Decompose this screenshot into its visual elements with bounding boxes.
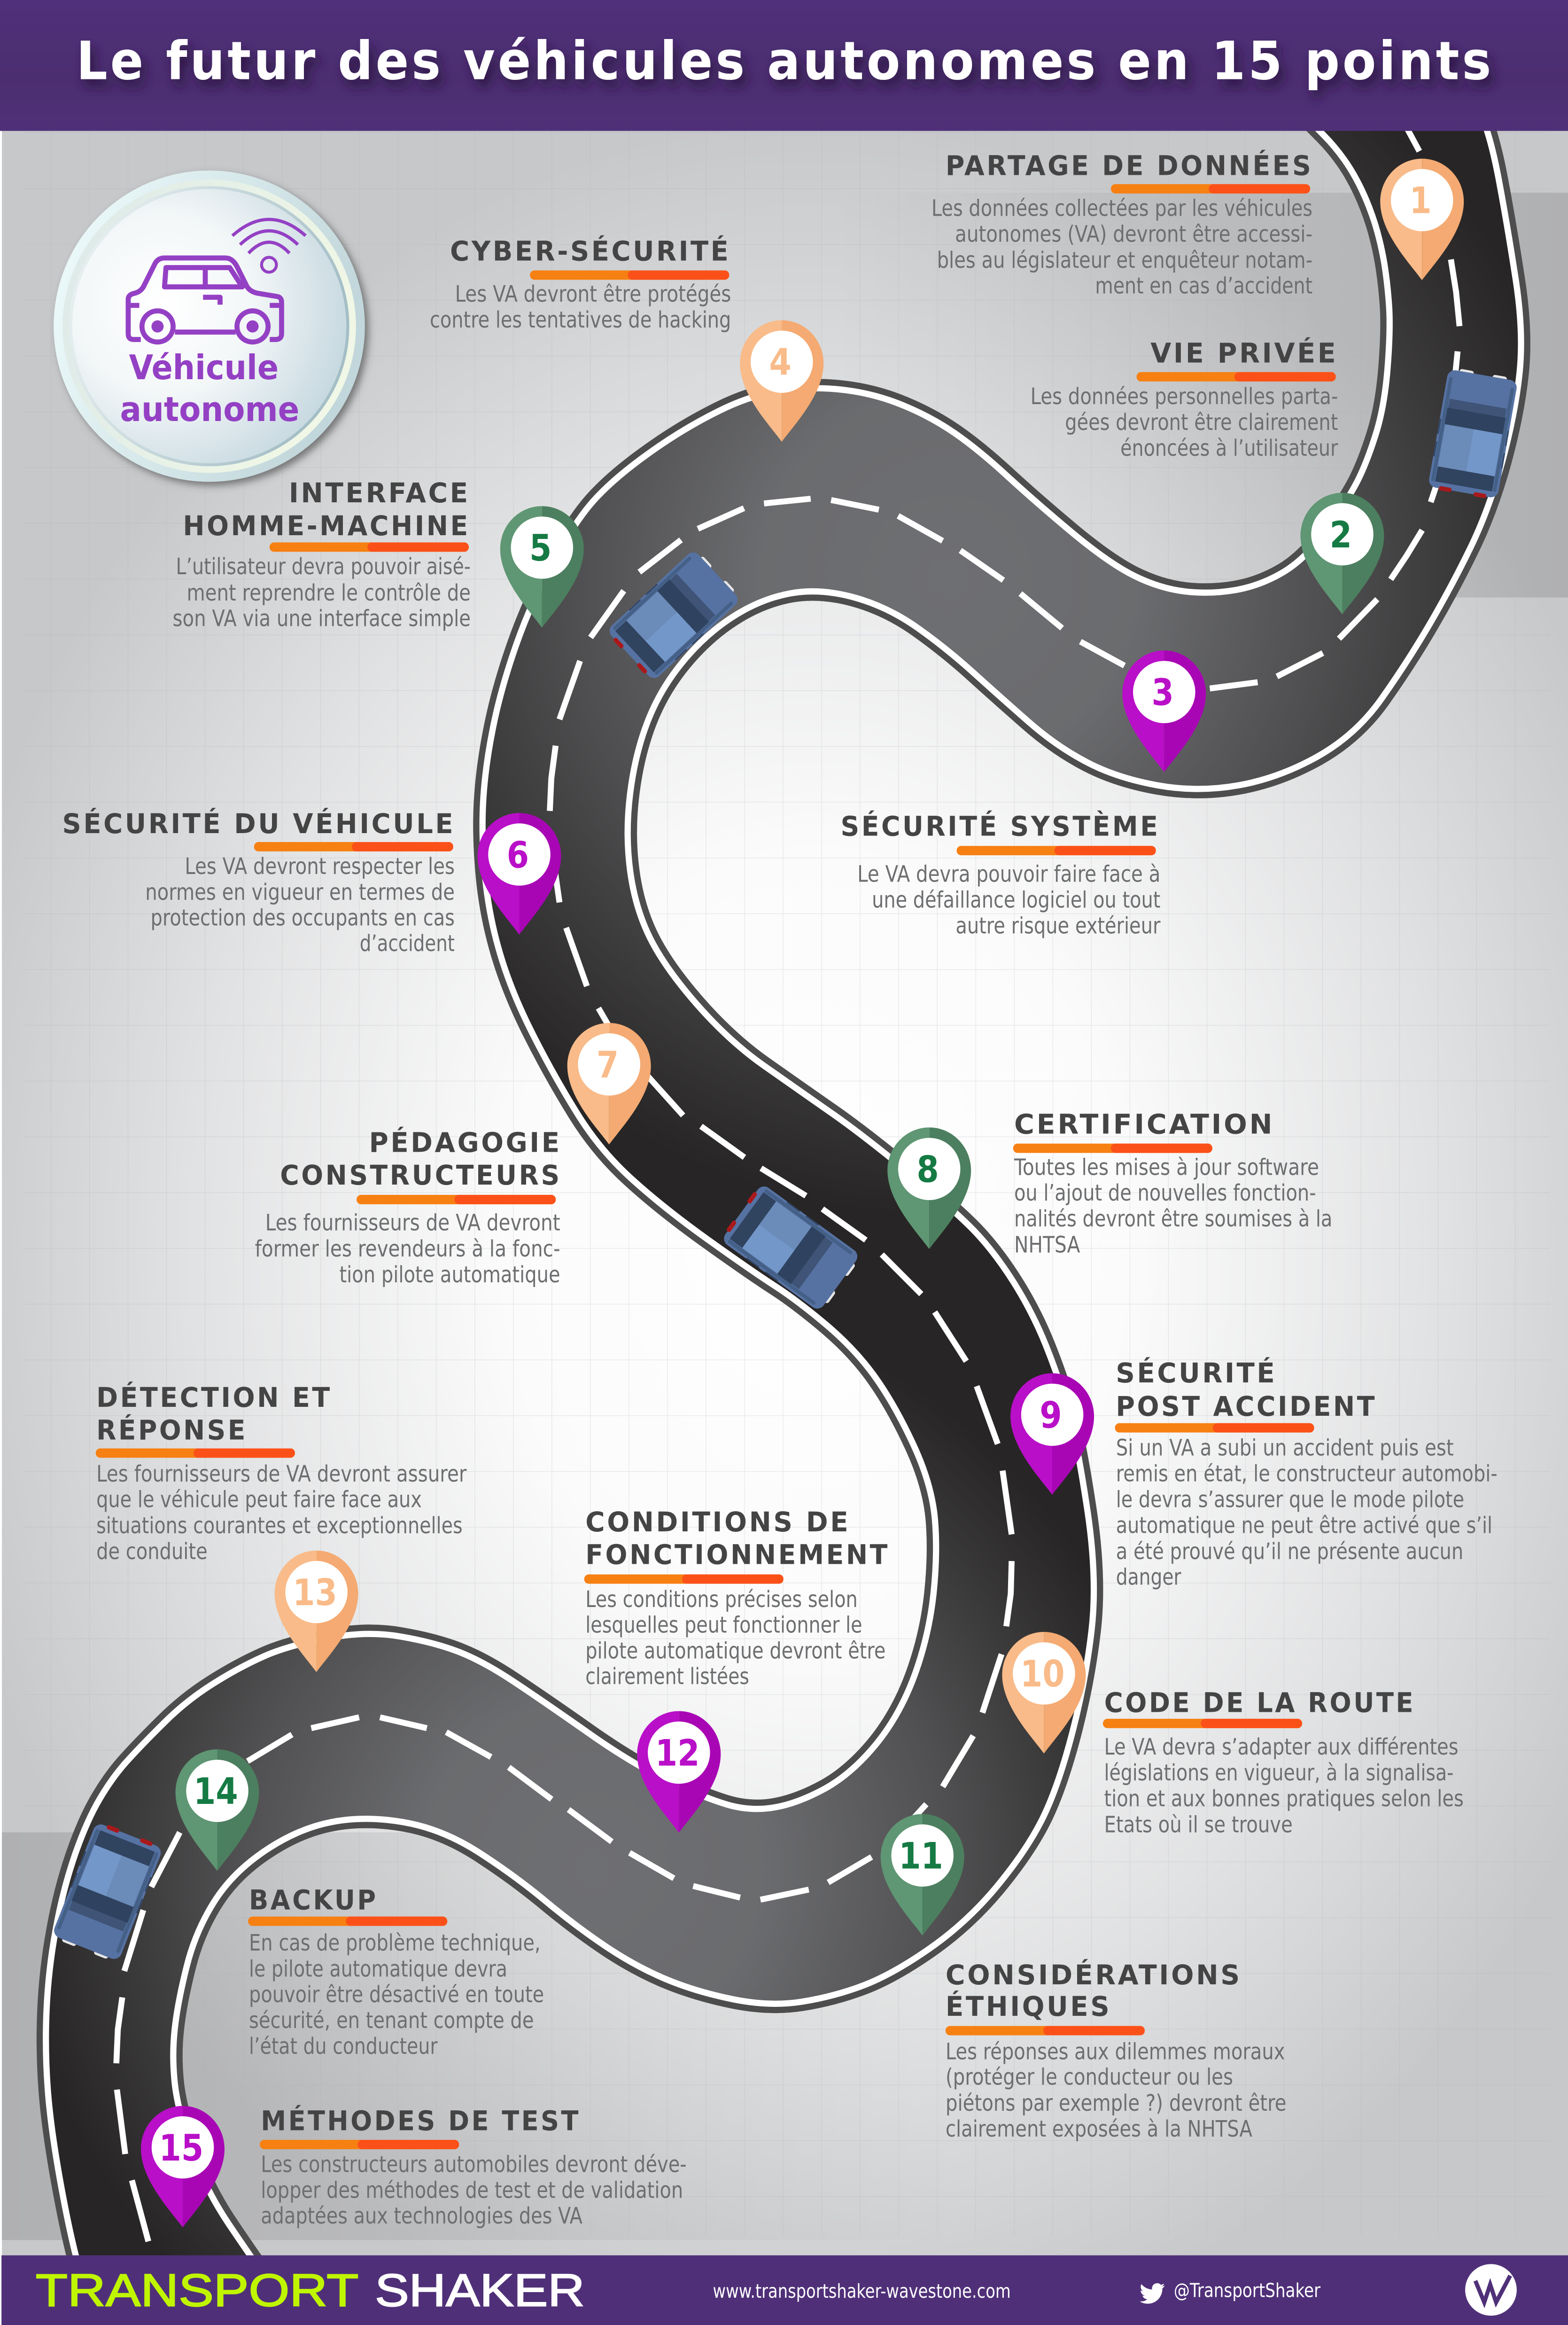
point 8: certification: NHTSA (1014, 1232, 1080, 1258)
point 13: détection et réponse: Les fournisseurs de VA devront assurer (96, 1461, 467, 1487)
wavestone logo (1465, 2264, 1517, 2316)
header band (0, 0, 1568, 131)
pin 13: 13 (293, 1572, 337, 1614)
point 4: cyber-sécurité (430, 235, 731, 333)
point 7: pédagogie constructeurs: Les fournisseurs de VA devront (265, 1210, 560, 1236)
point 3: sécurité système: Le VA devra pouvoir faire face à (857, 861, 1160, 888)
point 1: partage de données: bles au législateur et enquêteur notam- (937, 247, 1312, 273)
point 11: considérations éthiques: piétons par exemple ?) devront être (946, 2090, 1287, 2116)
point 12: conditions de fonctionnement: FONCTIONNEMENT (585, 1539, 890, 1571)
pin 12: 12 (655, 1732, 699, 1775)
pin 15 (141, 2106, 225, 2227)
pin 4 (740, 320, 823, 442)
point 5: interface homme-machine: L’utilisateur devra pouvoir aisé- (176, 554, 471, 580)
point 13: détection et réponse: RÉPONSE (96, 1414, 248, 1446)
point 10: code de la route: législations en vigueur, à la signalisa- (1104, 1760, 1453, 1786)
point 15: méthodes de test (260, 2105, 687, 2229)
point 1: partage de données: PARTAGE DE DONNÉES (946, 149, 1313, 181)
pin 12 (637, 1711, 721, 1833)
icon: connected car (128, 219, 306, 342)
point 9: sécurité post accident: POST ACCIDENT (1116, 1390, 1377, 1422)
point 8: certification: Toutes les mises à jour software (1014, 1154, 1319, 1180)
point 2: vie privée: gées devront être clairement (1065, 409, 1338, 436)
pin 14: 14 (194, 1771, 238, 1813)
point 12: conditions de fonctionnement: Les conditions précises selon (585, 1586, 858, 1613)
pin 9: 9 (1040, 1395, 1062, 1437)
pin 11 (881, 1814, 964, 1935)
point 6: sécurité du véhicule (62, 808, 455, 957)
point 14: backup: En cas de problème technique, (249, 1930, 541, 1956)
point 14: backup: sécurité, en tenant compte de (249, 2007, 534, 2034)
point 12: conditions de fonctionnement (584, 1506, 890, 1690)
point 10: code de la route: Etats où il se trouve (1104, 1811, 1293, 1838)
badge: véhicule autonome: autonome (120, 390, 299, 429)
website url: www.transportshaker-wavestone.com (713, 2280, 1011, 2302)
badge: véhicule autonome (54, 171, 365, 482)
point 7: pédagogie constructeurs: tion pilote automatique (339, 1262, 560, 1288)
point 1: partage de données: ment en cas d’accident (1095, 273, 1312, 299)
point 8: certification: nalités devront être soumises à la (1014, 1206, 1332, 1232)
pin 1: 1 (1409, 180, 1432, 222)
pin 3: 3 (1151, 672, 1174, 714)
twitter handle: @TransportShaker (1174, 2279, 1320, 2302)
point 1: partage de données: autonomes (VA) devront être accessi- (955, 221, 1312, 248)
point 9: sécurité post accident: a été prouvé qu’il ne présente aucun (1116, 1538, 1463, 1565)
point 10: code de la route: tion et aux bonnes pratiques selon les (1104, 1786, 1464, 1812)
point 8: certification: ou l’ajout de nouvelles fonction- (1014, 1180, 1316, 1206)
point 6: sécurité du véhicule: SÉCURITÉ DU VÉHICULE (62, 808, 455, 840)
point 12: conditions de fonctionnement: CONDITIONS DE (585, 1506, 850, 1538)
car 2 (605, 548, 742, 682)
point 4: cyber-sécurité: CYBER-SÉCURITÉ (450, 235, 730, 267)
pin 11: 11 (899, 1835, 943, 1878)
point 2: vie privée: énoncées à l’utilisateur (1120, 435, 1338, 461)
point 13: détection et réponse: de conduite (96, 1538, 208, 1565)
pin 2: 2 (1330, 514, 1352, 556)
pin 4: 4 (769, 342, 792, 384)
point 6: sécurité du véhicule: d’accident (360, 930, 455, 957)
point 11: considérations éthiques: clairement exposées à la NHTSA (946, 2116, 1252, 2142)
point 6: sécurité du véhicule: Les VA devront respecter les (185, 853, 455, 880)
pin 8 (887, 1127, 971, 1249)
point 11: considérations éthiques: CONSIDÉRATIONS (946, 1959, 1242, 1991)
pin 6 (478, 813, 561, 935)
pin 9 (1010, 1373, 1094, 1495)
badge label: Véhicule (129, 348, 279, 388)
pin 7: 7 (597, 1044, 619, 1086)
point 2: vie privée: Les données personnelles parta- (1031, 383, 1338, 410)
footer logo: SHAKER (375, 2264, 585, 2316)
car 4 (51, 1820, 164, 1964)
car 1 (1428, 367, 1518, 500)
footer logo (36, 2264, 585, 2316)
point 14: backup: pouvoir être désactivé en toute (249, 1982, 544, 2008)
point 15: méthodes de test: Les constructeurs automobiles devront déve- (261, 2152, 687, 2178)
point 7: pédagogie constructeurs: CONSTRUCTEURS (280, 1159, 562, 1191)
point 15: méthodes de test: lopper des méthodes de test et de validation (261, 2177, 683, 2203)
point 5: interface homme-machine: ment reprendre le contrôle de (187, 580, 471, 606)
point 13: détection et réponse: situations courantes et exceptionnelles (96, 1513, 463, 1539)
pin 5 (500, 506, 584, 628)
point 8: certification: CERTIFICATION (1014, 1108, 1274, 1140)
point 9: sécurité post accident: automatique ne peut être activé que s’il (1116, 1513, 1492, 1539)
point 14: backup: l’état du conducteur (249, 2033, 438, 2060)
footer logo: TRANSPORT (36, 2264, 359, 2316)
title: Le futur des véhicules autonomes en 15 points (76, 31, 1494, 92)
pin 15: 15 (159, 2127, 203, 2169)
point 9: sécurité post accident: Si un VA a subi un accident puis est (1116, 1435, 1454, 1461)
point 11: considérations éthiques: Les réponses aux dilemmes moraux (946, 2038, 1285, 2065)
point 5: interface homme-machine: INTERFACE (289, 477, 470, 509)
point 3: sécurité système: une défaillance logiciel ou tout (872, 887, 1160, 913)
point 14: backup: BACKUP (249, 1884, 378, 1916)
point 12: conditions de fonctionnement: lesquelles peut fonctionner le (585, 1612, 862, 1638)
pin 10 (1002, 1632, 1086, 1754)
point 11: considérations éthiques: (protéger le conducteur ou les (946, 2064, 1233, 2091)
point 7: pédagogie constructeurs: former les revendeurs à la fonc- (255, 1236, 560, 1262)
point 5: interface homme-machine (173, 477, 471, 632)
point 14: backup (248, 1884, 544, 2060)
point 5: interface homme-machine: son VA via une interface simple (173, 606, 471, 632)
point 10: code de la route: Le VA devra s’adapter aux différentes (1104, 1734, 1459, 1760)
point 15: méthodes de test: MÉTHODES DE TEST (261, 2105, 581, 2137)
point 3: sécurité système: SÉCURITÉ SYSTÈME (841, 810, 1160, 842)
point 13: détection et réponse: DÉTECTION ET (96, 1381, 332, 1413)
point 9: sécurité post accident (1115, 1357, 1498, 1591)
pin 7 (567, 1023, 651, 1145)
pin 3 (1122, 650, 1206, 772)
point 6: sécurité du véhicule: protection des occupants en cas (151, 905, 455, 931)
pin 14 (176, 1749, 259, 1871)
point 1: partage de données (931, 149, 1313, 299)
point 13: détection et réponse (96, 1381, 467, 1565)
pin 2 (1301, 493, 1384, 614)
pin 10: 10 (1020, 1653, 1065, 1695)
footer band (1, 2255, 1568, 2325)
icon: twitter bird (1140, 2283, 1165, 2304)
point 12: conditions de fonctionnement: pilote automatique devront être (585, 1638, 885, 1664)
pin 13 (275, 1551, 358, 1672)
point 2: vie privée: VIE PRIVÉE (1150, 337, 1338, 369)
point 2: vie privée (1031, 337, 1338, 461)
point 9: sécurité post accident: le devra s’assurer que le mode pilote (1116, 1487, 1464, 1513)
pin 6: 6 (507, 834, 529, 876)
pin 1 (1380, 159, 1464, 280)
point 3: sécurité système (841, 810, 1160, 939)
point 7: pédagogie constructeurs (255, 1126, 562, 1288)
road centre dashes (116, 125, 1459, 2241)
point 9: sécurité post accident: danger (1116, 1564, 1181, 1591)
point 9: sécurité post accident: remis en état, le constructeur automobi- (1116, 1460, 1498, 1487)
point 13: détection et réponse: que le véhicule peut faire face aux (96, 1487, 422, 1513)
point 7: pédagogie constructeurs: PÉDAGOGIE (369, 1126, 562, 1158)
point 10: code de la route (1103, 1687, 1464, 1838)
point 9: sécurité post accident: SÉCURITÉ (1116, 1357, 1277, 1389)
point 11: considérations éthiques: ÉTHIQUES (946, 1990, 1111, 2022)
point 12: conditions de fonctionnement: clairement listées (585, 1663, 749, 1690)
point 5: interface homme-machine: HOMME-MACHINE (183, 510, 470, 542)
point 11: considérations éthiques (946, 1959, 1287, 2142)
point 1: partage de données: Les données collectées par les véhicules (931, 195, 1312, 222)
car 3 (719, 1182, 862, 1313)
point 4: cyber-sécurité: Les VA devront être protégés (455, 281, 731, 307)
point 3: sécurité système: autre risque extérieur (955, 913, 1160, 939)
point 8: certification (1013, 1108, 1332, 1258)
pin 8: 8 (916, 1148, 939, 1191)
point 6: sécurité du véhicule: normes en vigueur en termes de (145, 879, 455, 905)
pin 5: 5 (529, 527, 551, 570)
point 15: méthodes de test: adaptées aux technologies des VA (261, 2203, 582, 2229)
point 14: backup: le pilote automatique devra (249, 1956, 507, 1982)
point 4: cyber-sécurité: contre les tentatives de hacking (430, 307, 731, 333)
point 10: code de la route: CODE DE LA ROUTE (1104, 1687, 1415, 1719)
